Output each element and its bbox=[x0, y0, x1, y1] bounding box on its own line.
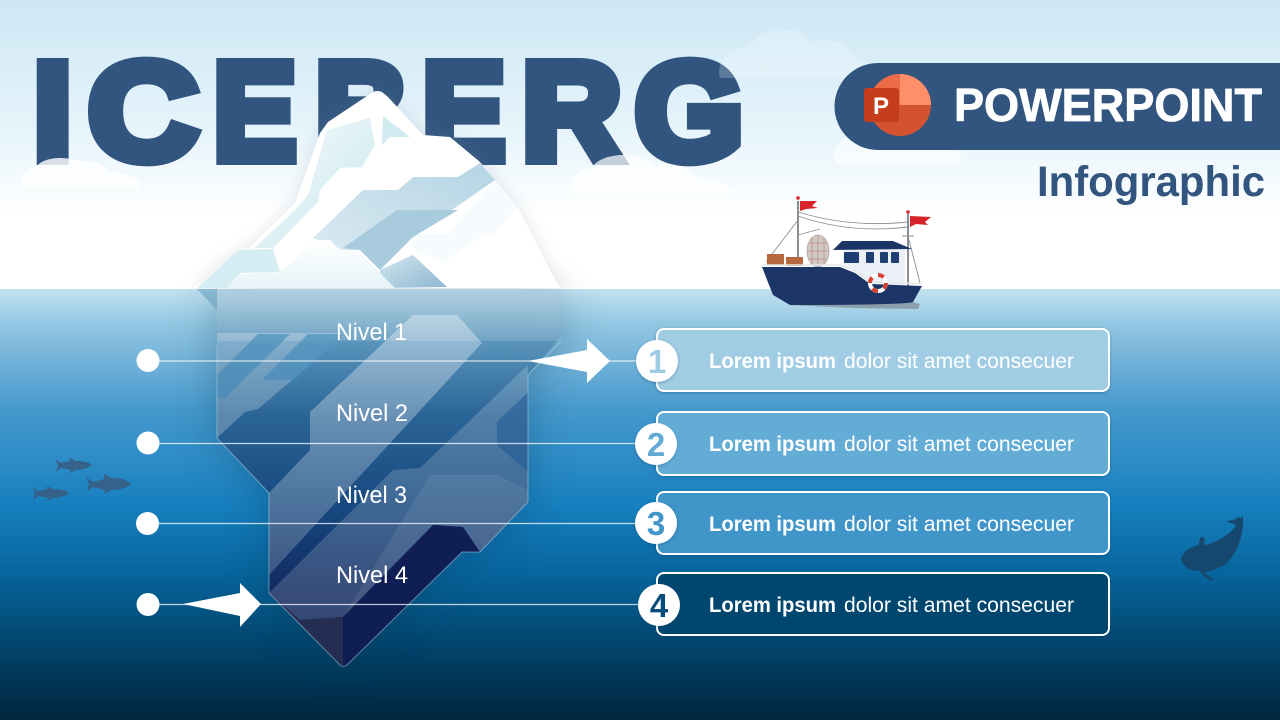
card 2: dolor sit amet consecuer bbox=[844, 433, 1074, 456]
facet: peak triangle bbox=[382, 116, 410, 145]
card 3 bbox=[635, 492, 1109, 554]
cloud: top right bbox=[719, 29, 869, 78]
facet: right strip bbox=[413, 180, 518, 262]
level dots bbox=[136, 349, 160, 616]
facet: band two bbox=[269, 365, 528, 620]
masts bbox=[766, 201, 920, 286]
fish school bbox=[32, 458, 131, 501]
cloud: center bbox=[570, 155, 733, 195]
facet: glass band bbox=[217, 288, 561, 341]
facet: bottom grey bbox=[269, 593, 343, 667]
flags bbox=[796, 196, 931, 227]
card 1: 1 bbox=[648, 343, 666, 380]
title: B bbox=[315, 35, 409, 189]
facet: white right bbox=[448, 210, 555, 287]
facet: lower hill bbox=[227, 240, 395, 288]
cloud: behind pill bbox=[835, 132, 962, 164]
card 2 bbox=[635, 412, 1109, 475]
facet: stripe one bbox=[217, 334, 290, 398]
facet: left light bbox=[217, 333, 345, 438]
title bbox=[34, 34, 743, 189]
clouds bbox=[22, 29, 962, 195]
windows bbox=[844, 252, 899, 263]
facet: stripe two bbox=[262, 334, 345, 380]
arrow bottom bbox=[183, 583, 261, 627]
card 3: Lorem ipsum bbox=[709, 513, 836, 536]
iceberg underwater body bbox=[197, 288, 561, 667]
sky background bbox=[0, 0, 1280, 289]
title: R bbox=[522, 35, 622, 189]
facet: pale ridge bbox=[254, 118, 375, 248]
boat shadow bbox=[790, 302, 920, 309]
facet: lower right bbox=[343, 475, 528, 617]
label: Nivel 2: Nivel 2 bbox=[336, 400, 408, 427]
iceberg bbox=[195, 91, 561, 667]
card 4: Lorem ipsum bbox=[709, 594, 836, 617]
rail bbox=[762, 265, 922, 284]
card 4 bbox=[638, 573, 1109, 635]
cabin bbox=[843, 248, 905, 285]
card 4: dolor sit amet consecuer bbox=[844, 594, 1074, 617]
title: E bbox=[213, 34, 296, 188]
icon: powerpoint logo bbox=[864, 74, 931, 136]
facet: lower blue bbox=[380, 255, 447, 288]
card 1 bbox=[636, 329, 1109, 391]
label: Nivel 3: Nivel 3 bbox=[336, 482, 407, 509]
icon: powerpoint logo: P bbox=[873, 93, 889, 120]
iceberg shadow sky bbox=[195, 91, 561, 288]
fishing boat bbox=[762, 196, 931, 309]
life ring bbox=[870, 275, 886, 291]
title: I bbox=[34, 35, 72, 189]
iceberg shadow underwater bbox=[217, 300, 560, 667]
card 1: Lorem ipsum bbox=[709, 350, 836, 373]
label: Nivel 1: Nivel 1 bbox=[336, 319, 407, 346]
title: E bbox=[422, 34, 505, 188]
card 4: 4 bbox=[650, 587, 669, 624]
title: C bbox=[88, 34, 198, 188]
card 1: dolor sit amet consecuer bbox=[844, 350, 1074, 373]
card 2: Lorem ipsum bbox=[709, 433, 836, 456]
roof bbox=[833, 241, 912, 250]
card 2: 2 bbox=[647, 426, 665, 463]
facet: blue inner bbox=[343, 210, 458, 270]
net bbox=[807, 235, 829, 267]
label: Nivel 4: Nivel 4 bbox=[336, 562, 408, 589]
crates bbox=[767, 254, 803, 266]
title: G bbox=[635, 35, 743, 189]
subtitle: Infographic bbox=[1037, 158, 1265, 206]
hull bbox=[762, 267, 922, 305]
iceberg tip bbox=[195, 91, 561, 288]
facet: bottom dark bbox=[343, 525, 480, 667]
card 3: dolor sit amet consecuer bbox=[844, 513, 1074, 536]
cloud: left bbox=[22, 158, 141, 187]
sea background bbox=[0, 289, 1280, 720]
fish 2 bbox=[32, 486, 69, 501]
pill heading: POWERPOINT bbox=[954, 79, 1262, 131]
connector lines bbox=[148, 361, 640, 604]
card 3: 3 bbox=[647, 505, 665, 542]
arrow top bbox=[528, 339, 610, 383]
whale bbox=[1181, 516, 1243, 581]
facet: band one bbox=[269, 315, 482, 575]
body outline bbox=[217, 341, 561, 666]
facet: left pale bbox=[197, 249, 280, 288]
fish 3 bbox=[86, 474, 131, 494]
facet: notch bbox=[497, 392, 528, 472]
powerpoint pill bbox=[834, 63, 1280, 150]
level labels bbox=[336, 319, 408, 589]
fish 1 bbox=[55, 458, 92, 473]
facet: blue upper bbox=[313, 163, 495, 270]
